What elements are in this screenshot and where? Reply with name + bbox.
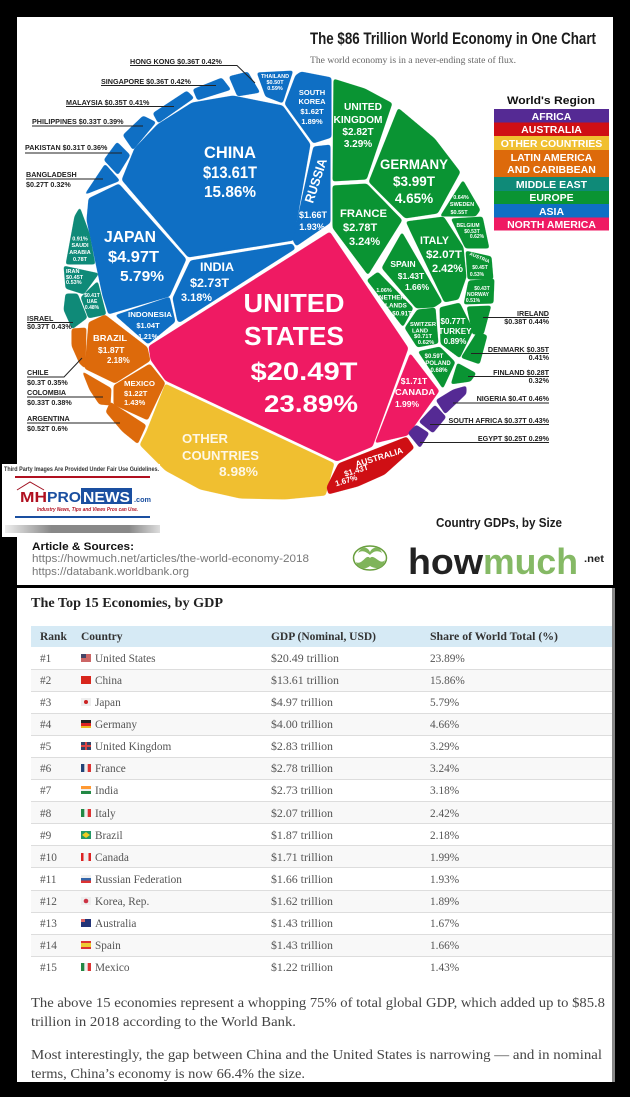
panel: infographic [2,17,613,585]
callout: south africa: SOUTH AFRICA $0.37T 0.43% [448,416,550,425]
row 15: Mexico [95,962,130,974]
region: poland: POLAND [425,361,451,367]
logo: mhpronews: PRO [47,489,81,506]
row 15: #15 [40,962,57,974]
row 6: 3.24% [430,763,460,775]
row 8: #8 [40,808,52,820]
region: turkey: TURKEY [439,327,472,336]
region: belgium: 0.62% [470,234,485,240]
row 15: 1.43% [430,962,460,974]
row 12: #12 [40,896,57,908]
region: netherlands: NETHER [379,294,405,302]
row 4: Germany [95,719,137,731]
callout: ireland: $0.38T 0.44% [504,317,550,326]
row 13: 1.67% [430,918,460,930]
region: south africa [418,404,447,434]
row 2: China [95,675,122,687]
region: australia: 1.67% [334,473,358,488]
region: egypt [407,424,430,449]
region: france: 3.24% [349,236,380,248]
region: germany: $3.99T [393,174,436,189]
region: other countries: COUNTRIES [182,449,259,463]
region: thailand: $0.50T [266,80,284,86]
region: thailand: THAILAND [261,74,289,80]
region: nigeria [435,385,467,415]
region: south korea: SOUTH [299,88,325,97]
region: norway [463,278,495,305]
region: south korea: $1.62T [300,107,324,116]
region: china: 15.86% [204,184,256,201]
row 3: Japan [95,697,121,709]
callout: pakistan: PAKISTAN $0.31T 0.36% [25,143,108,152]
region: colombia [81,370,112,406]
callout: egypt: EGYPT $0.25T 0.29% [478,434,550,443]
region: indonesia: INDONESIA [128,310,173,319]
region: france [332,183,403,276]
callout: israel: $0.37T 0.43% [27,322,72,331]
region: united kingdom: $2.82T [342,127,374,138]
row 5: $2.83 trillion [271,741,333,753]
region: belgium [450,216,490,249]
region: japan: JAPAN [104,229,156,246]
subtitle: The world economy is in a never-ending state of flux. [310,55,516,66]
region: switzerland: SWITZER [410,322,437,328]
row 7: #7 [40,785,52,797]
row 6: France [95,763,126,775]
region: spain: $1.43T [398,271,425,281]
row 1: United States [95,653,156,665]
row 10: 1.99% [430,852,460,864]
region: poland: 0.68% [430,368,448,374]
region: israel [63,293,88,330]
region: mexico: 1.43% [124,398,146,407]
logo: mhpronews: NEWS [83,490,130,506]
region: italy: 2.42% [432,263,463,275]
callout: finland: 0.32% [529,376,550,385]
legend: world's region: LATIN AMERICA [511,152,593,164]
row 11: 1.93% [430,874,460,886]
region: iran: IRAN [66,269,79,275]
region: ireland [466,305,492,335]
region: russia [292,144,331,247]
region: turkey [439,302,474,359]
callout: singapore: SINGAPORE $0.36T 0.42% [101,77,191,86]
region: other countries: 8.98% [219,465,258,479]
region: austria: 0.53% [470,272,485,278]
region: india [172,243,296,323]
region: austria: $0.45T [472,265,488,271]
region: italy [405,216,467,303]
region: italy: ITALY [420,235,450,247]
region: finland [450,362,477,385]
region: australia: AUSTRALIA [354,445,404,469]
region: united states: $20.49T [250,358,358,386]
region: brazil [84,314,151,384]
logo: howmuch.net: much [483,541,578,582]
row 8: Italy [95,808,116,820]
row 14: $1.43 trillion [271,940,333,952]
row 9: Brazil [95,830,123,842]
row 2 [40,675,465,687]
callout: israel [27,314,73,331]
region: united states [148,231,409,462]
table [31,626,612,974]
callout: denmark [471,345,550,362]
region: iran: 0.53% [66,280,82,286]
region: netherlands: LANDS [385,302,407,310]
table header: GDP (Nominal, USD) [271,631,376,643]
row 2: 15.86% [430,675,465,687]
region: other countries [139,383,335,500]
region: poland: $0.59T [425,354,444,360]
region: argentina [105,401,147,445]
text block: article and sources: Article & Sources: [32,541,134,553]
row 13: $1.43 trillion [271,918,333,930]
row 15 [40,962,460,974]
region: netherlands: 1.06% [376,288,392,294]
row 1: $20.49 trillion [271,653,339,665]
region: switzerland [404,307,439,348]
region: thailand: 0.59% [267,86,283,92]
legend: world's region: AND CARIBBEAN [507,164,596,176]
logo: mhpronews: Third Party Images Are Provided Under Fair Use Guidelines. [4,466,159,473]
region: mexico: MEXICO [124,379,155,388]
legend: world's region: MIDDLE EAST [516,179,588,191]
callout: colombia [27,388,103,407]
logo: mhpronews: Industry News, Tips and Views Pros can Use. [37,507,138,513]
region: india: INDIA [200,260,234,274]
region: hong kong [228,71,261,97]
region: chile [71,327,87,370]
region: norway: $0.43T [474,286,490,292]
table header: Rank [40,631,67,643]
callout: hong kong: HONG KONG $0.36T 0.42% [130,57,222,66]
region: denmark [460,331,488,365]
callout: argentina: ARGENTINA [27,414,70,423]
region: bangladesh [83,163,121,196]
row 2: $13.61 trillion [271,675,339,687]
region: brazil: BRAZIL [93,333,127,343]
region: japan [86,183,187,315]
region: japan: $4.97T [108,249,159,266]
logo: howmuch.net: how [408,541,484,582]
row 11: $1.66 trillion [271,874,333,886]
region: germany: 4.65% [395,191,433,206]
region: switzerland: 0.62% [418,340,434,346]
text block: article and sources [32,541,309,578]
table header: Country [81,631,123,643]
region: poland [417,346,456,390]
row 1: #1 [40,653,51,665]
caption: country gdps by size: Country GDPs, by Size [436,515,562,530]
callout: ireland [483,309,550,326]
region: uae: 0.48% [85,305,100,311]
region: india: $2.73T [190,276,230,290]
row 4 [40,719,460,731]
region: indonesia: 1.21% [138,334,159,341]
row 14: Spain [95,940,121,952]
row 9: #9 [40,830,52,842]
region: saudi arabia: ARABIA [69,250,91,256]
region: pakistan [103,141,131,176]
region: united kingdom: KINGDOM [334,115,382,126]
row 7 [40,785,460,797]
row 7: $2.73 trillion [271,785,333,797]
table header: Share of World Total (%) [430,631,558,643]
region: united kingdom: UNITED [344,102,382,113]
logo: mhpronews [2,464,160,537]
legend: world's region: ASIA [539,206,564,218]
region: sweden: SWEDEN [450,202,474,208]
region: sweden: 0.64% [453,195,469,201]
callout: israel: ISRAEL [27,314,54,323]
region: canada [374,352,440,444]
row 6 [40,763,460,775]
region: australia [326,436,415,495]
region: turkey: 0.89% [444,337,466,346]
region: saudi arabia: SAUDI [71,243,89,249]
callout: chile: CHILE [27,368,49,377]
row 4: #4 [40,719,52,731]
region: china: $13.61T [203,163,258,182]
region: switzerland: LAND [412,328,428,334]
callout: argentina: $0.52T 0.6% [27,424,68,433]
logo: howmuch.net: .net [584,553,605,565]
callout: bangladesh: BANGLADESH [26,170,77,179]
row 11: #11 [40,874,57,886]
row 8: $2.07 trillion [271,808,333,820]
row 2: #2 [40,675,52,687]
region: iran: $0.45T [66,275,84,281]
region: norway: 0.51% [466,298,481,304]
paragraph: 75 percent of gdp: trillion in 2018 according to the World Bank. [31,1015,296,1030]
callout: colombia: COLOMBIA [27,388,66,397]
row 8: 2.42% [430,808,460,820]
region: south korea: 1.89% [301,117,323,126]
paragraph: china vs united states [31,1048,602,1082]
heading: top 15 economies: The Top 15 Economies, by GDP [31,595,223,610]
region: indonesia: $1.04T [136,321,160,330]
region: germany [368,107,461,219]
callout: denmark: 0.41% [529,353,550,362]
region: other countries: OTHER [182,432,228,446]
region: russia: $1.66T [299,210,328,220]
region: united states: STATES [244,321,344,351]
row 1: 23.89% [430,653,465,665]
row 5 [40,741,460,753]
legend: world's region: World's Region [507,95,595,107]
region: austria [465,250,494,280]
region: thailand [256,70,294,104]
legend: world's region: AFRICA [532,111,572,123]
region: brazil: $1.87T [98,345,125,355]
region: sweden [439,179,481,217]
region: south korea [284,71,332,144]
row 13 [40,918,460,930]
region: brazil: 2.18% [107,356,130,365]
region: mexico: $1.22T [124,389,148,398]
row 4: 4.66% [430,719,460,731]
legend: world's region: AUSTRALIA [521,124,582,136]
row 13: Australia [95,918,136,930]
region: australia: $1.43T [343,463,370,479]
legend: world's region: NORTH AMERICA [507,219,596,231]
callout: nigeria: NIGERIA $0.4T 0.46% [477,394,550,403]
region: canada: $1.71T [401,376,428,386]
callout: finland: FINLAND $0.28T [493,368,550,377]
region: russia: 1.93% [299,222,325,232]
region: uae: $0.41T [84,293,100,299]
row 3: #3 [40,697,52,709]
region: norway: NORWAY [467,292,490,298]
logo: mhpronews: MH [20,489,47,506]
row 13: #13 [40,918,57,930]
row 11 [40,874,460,886]
callout: malaysia: MALAYSIA $0.35T 0.41% [66,98,150,107]
region: germany: GERMANY [380,157,448,172]
row 3 [40,697,460,709]
row 8 [40,808,460,820]
table header [40,631,558,643]
callout: hong kong [130,57,255,83]
region: south korea: KOREA [298,97,326,106]
row 14: #14 [40,940,57,952]
row 5: United Kingdom [95,741,171,753]
row 4: $4.00 trillion [271,719,333,731]
region: united kingdom [332,78,393,182]
legend: world's region: EUROPE [529,192,574,204]
legend: world's region: OTHER COUNTRIES [501,138,602,150]
callout: finland [468,368,550,385]
region: sweden: $0.55T [450,210,468,216]
region: spain: 1.66% [405,282,429,292]
row 12: $1.62 trillion [271,896,333,908]
text block: article and sources: https://databank.worldbank.org [32,566,189,578]
row 15: $1.22 trillion [271,962,333,974]
region: belgium: BELGIUM [456,223,480,229]
row 14: 1.66% [430,940,460,952]
row 6: #6 [40,763,52,775]
row 3: $4.97 trillion [271,697,333,709]
chart: world economy voronoi [63,70,495,500]
callout: chile [27,358,82,387]
region: spain [381,231,443,309]
callout: argentina [27,414,120,433]
region: russia: RUSSIA [301,156,330,205]
region: spain: SPAIN [390,259,416,269]
row 9 [40,830,460,842]
region: canada: CANADA [395,387,435,397]
region: italy: $2.07T [426,249,462,261]
region: malaysia [152,90,195,124]
callout: chile: $0.3T 0.35% [27,378,68,387]
callout: egypt [420,434,550,443]
callout: bangladesh: $0.27T 0.32% [26,180,71,189]
paragraph: china vs united states: Most interestingly, the gap between China and the United States is narrowing — and in nominal [31,1048,602,1063]
icon: howmuch mustache [354,546,386,570]
region: uae [80,280,107,319]
paragraph: 75 percent of gdp [31,996,605,1030]
logo: mhpronews: .com [134,497,151,504]
row 10: #10 [40,852,57,864]
row 3: 5.79% [430,697,460,709]
region: mexico [113,363,166,421]
callout: denmark: DENMARK $0.35T [488,345,550,354]
row 1 [40,653,465,665]
region: netherlands [366,271,414,328]
row 10: Canada [95,852,129,864]
region: saudi arabia: 0.91% [72,236,88,242]
region: france: $2.78T [343,222,378,234]
row 9: 2.18% [430,830,460,842]
region: belgium: $0.53T [464,229,480,235]
callout: philippines: PHILIPPINES $0.33T 0.39% [32,117,124,126]
row 7: 3.18% [430,785,460,797]
row 12 [40,896,460,908]
callout: colombia: $0.33T 0.38% [27,398,72,407]
logo: howmuch.net [408,541,605,582]
paragraph: 75 percent of gdp: The above 15 economies represent a whopping 75% of total global GDP, which added up to $85.8 [31,996,605,1011]
region: philippines [122,115,157,151]
region: canada: 1.99% [395,399,419,409]
row 11: Russian Federation [95,874,182,886]
row 5: #5 [40,741,52,753]
row 5: 3.29% [430,741,460,753]
region: united states: 23.89% [264,391,358,418]
text block: article and sources: https://howmuch.net/articles/the-world-economy-2018 [32,553,309,565]
row 10: $1.71 trillion [271,852,333,864]
row 9: $1.87 trillion [271,830,333,842]
region: netherlands: $0.91T [392,310,412,318]
row 7: India [95,785,118,797]
panel: top 15 table [17,588,615,1082]
region: japan: 5.79% [120,268,164,285]
row 6: $2.78 trillion [271,763,333,775]
region: iran [63,265,100,295]
region: united kingdom: 3.29% [344,139,372,150]
row 10 [40,852,460,864]
region: united states: UNITED [244,288,344,318]
row 12: Korea, Rep. [95,896,149,908]
row 14 [40,940,460,952]
region: uae: UAE [87,299,98,305]
callout: ireland: IRELAND [517,309,549,318]
paragraph: china vs united states: terms, China’s economy is now 66.4% the size. [31,1067,305,1082]
legend: world's region [494,95,609,231]
region: china: CHINA [204,143,256,162]
row 12: 1.89% [430,896,460,908]
region: switzerland: $0.71T [414,334,432,340]
callout: bangladesh [26,170,103,189]
region: india: 3.18% [181,292,212,304]
region: indonesia [114,296,176,345]
region: singapore [192,77,232,101]
region: turkey: $0.77T [441,317,466,326]
region: saudi arabia: 0.78T [73,257,88,263]
region: china [121,95,311,258]
region: saudi arabia [65,206,96,265]
region: france: FRANCE [340,208,387,220]
region: austria: AUSTRIA [468,251,491,265]
